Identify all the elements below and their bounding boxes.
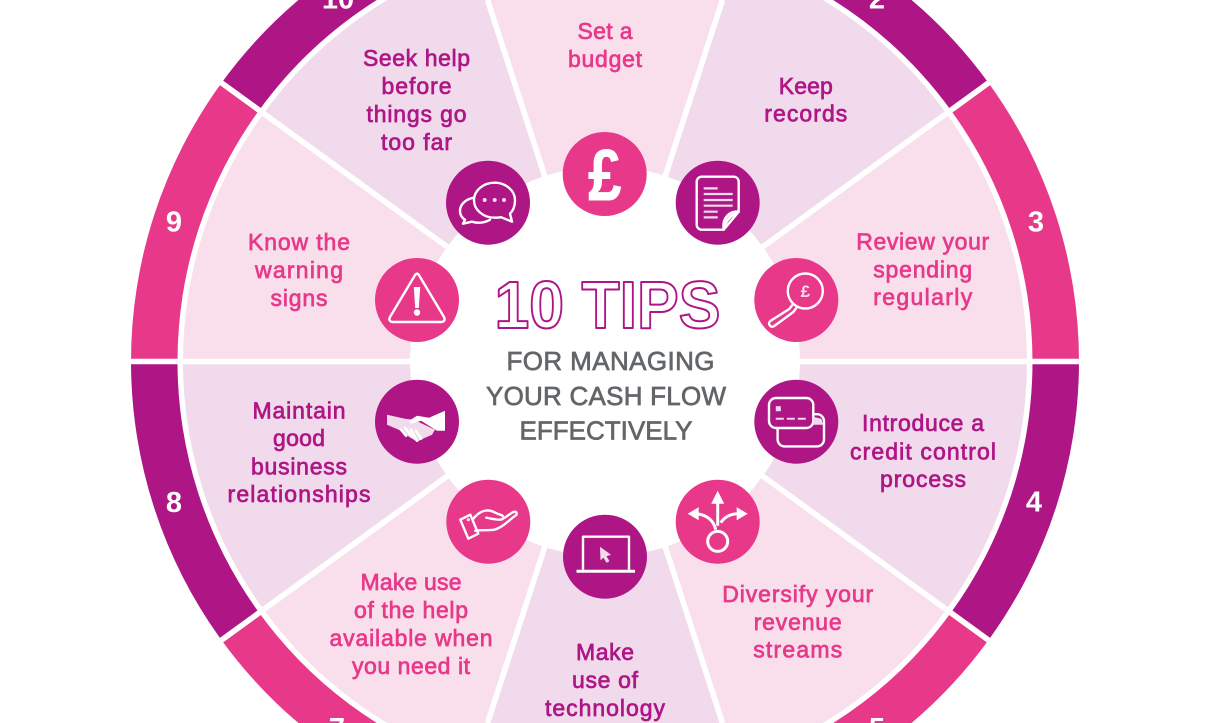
tip 10: seek help [322, 0, 530, 245]
icon: credit cards [754, 380, 838, 464]
tip 10 text [363, 45, 470, 155]
tip 9 text: warning [254, 257, 343, 283]
tip 7 text: Make use [360, 569, 462, 595]
icon: handshake [375, 380, 459, 464]
icon: document [676, 161, 760, 245]
tip 6 text: use of [572, 667, 639, 693]
tip 1 text: budget [568, 46, 643, 72]
tip 3 text: regularly [873, 284, 973, 310]
subheading: FOR MANAGING [506, 346, 714, 376]
tip 10 text: before [382, 73, 452, 99]
tip 3 text [856, 228, 990, 310]
tip 2 text: Keep [779, 73, 833, 99]
tip 5 text: revenue [754, 609, 842, 635]
wedge panels [183, 0, 1027, 723]
tip 6 text: technology [545, 695, 666, 721]
tip 2 text: records [764, 100, 847, 126]
title block [486, 268, 726, 446]
tip 2 text [764, 73, 847, 126]
tip 7 text: of the help [354, 597, 468, 623]
tip 5 text: streams [753, 636, 842, 662]
subheading: EFFECTIVELY [520, 416, 692, 446]
tip 10 text: too far [381, 129, 452, 155]
tip 10 text: Seek help [363, 45, 470, 71]
subheading: YOUR CASH FLOW [486, 381, 726, 411]
subheading [486, 346, 726, 446]
tip 9: know the warning signs [166, 206, 459, 342]
icon: warning triangle [375, 258, 459, 342]
tip 4 text: credit control [850, 438, 996, 464]
tip 8 number: 8 [166, 487, 182, 519]
icon: pound sign [563, 132, 647, 216]
icon: pound sign: £ [588, 136, 621, 216]
icon: open hand [446, 480, 530, 564]
wheel background: ring, wedges, spokes and hub [125, 0, 1085, 723]
tip 9 text: Know the [248, 229, 350, 255]
icon: chat bubbles [446, 161, 530, 245]
icon: diverging arrows [676, 480, 760, 564]
tip 8 text: business [251, 454, 347, 480]
tip 7 text [330, 569, 492, 679]
tip 7 text: you need it [352, 653, 471, 679]
tip 4 text: process [880, 466, 966, 492]
tip 6 text [545, 639, 666, 721]
tip 8 text [228, 398, 370, 507]
tip 1 text [568, 18, 643, 72]
icon: laptop [563, 515, 647, 599]
tip 1 text: Set a [578, 18, 633, 44]
tip 9 text [248, 229, 350, 311]
tip 5 text: Diversify your [722, 581, 874, 607]
tip 6 text: Make [576, 639, 634, 665]
tip 8: business relationships [166, 380, 459, 519]
tip 5: diversify revenue [676, 480, 885, 723]
tip 7 text: available when [330, 625, 492, 651]
tip 4: credit control [754, 380, 1042, 518]
tip 4 text: Introduce a [862, 410, 984, 436]
tip 2: keep records [676, 0, 885, 245]
tip 9 number: 9 [166, 206, 182, 238]
tip 4 text [850, 410, 996, 492]
central white hub [410, 166, 800, 556]
tip 5 text [722, 581, 874, 662]
tip 10 text: things go [366, 101, 466, 127]
tip 3 text: Review your [856, 228, 990, 254]
tip 4 number: 4 [1026, 486, 1042, 518]
tip 3 number: 3 [1028, 206, 1044, 238]
tip 9 text: signs [270, 285, 328, 311]
tip 8 text: Maintain [252, 398, 346, 424]
tip 3 text: spending [873, 256, 972, 282]
tip 6: make use of technology [545, 515, 666, 721]
tip 1: set a budget [563, 18, 647, 216]
tip 8 text: relationships [228, 481, 370, 507]
outer ring segments [131, 0, 1079, 723]
tip 8 text: good [273, 425, 325, 451]
tip 7: make use of the help [329, 480, 530, 723]
heading: 10 TIPS: 10 TIPS [494, 268, 720, 343]
icon: magnifying glass with pound: £ [801, 282, 811, 301]
tip 3: review your spending [754, 206, 1044, 342]
icon: magnifying glass with pound [754, 258, 838, 342]
